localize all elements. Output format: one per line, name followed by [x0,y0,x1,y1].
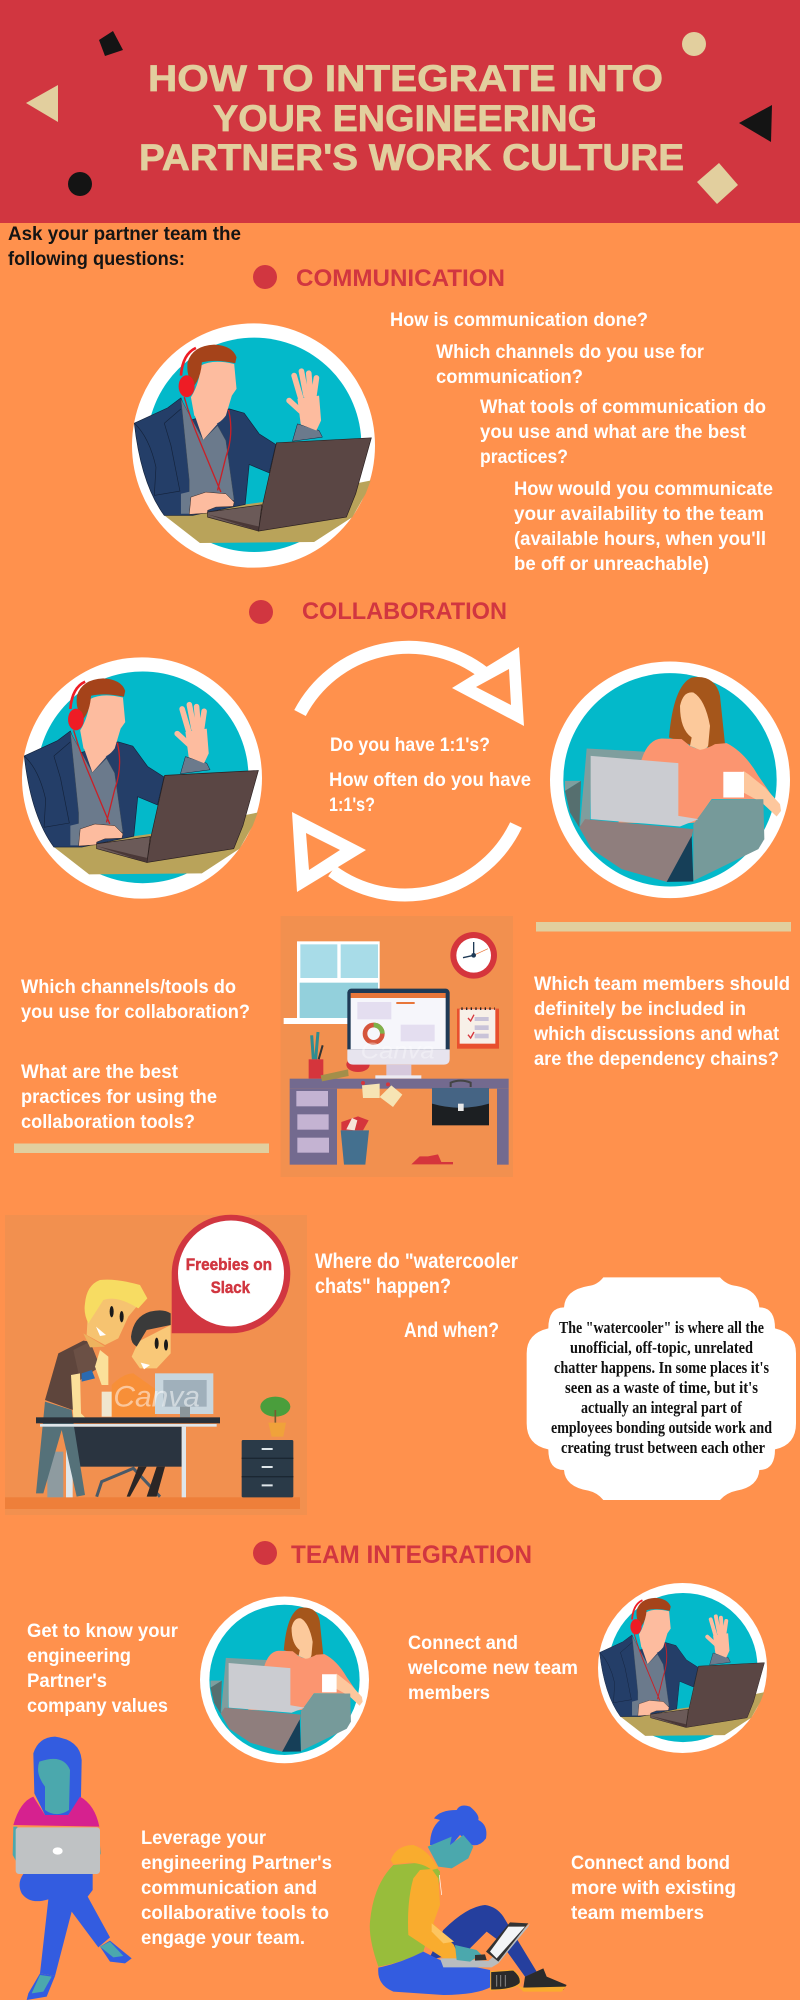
watercooler questions: Where do "watercooler [315,1250,518,1273]
welcome new members text: welcome new team [407,1657,578,1679]
illustration: man with laptop [22,657,262,899]
icon: black triangle [739,105,772,142]
bond with existing members text: more with existing [571,1877,736,1899]
engage tools text: engineering Partner's [141,1852,332,1874]
company values text: Get to know your [27,1620,178,1642]
team members question [533,973,790,1070]
team members question: Which team members should [534,973,790,995]
watercooler questions: chats" happen? [315,1275,451,1298]
communication questions: practices? [480,446,568,468]
illustration: office desk [281,916,513,1177]
engage tools text: engage your team. [141,1927,305,1949]
communication questions: be off or unreachable) [514,553,709,575]
icon: cream diamond [697,163,738,204]
team members question: which discussions and what [533,1023,779,1045]
communication questions: communication? [436,366,583,388]
intro text: Ask your partner team the [8,223,241,245]
engage tools text: collaborative tools to [141,1902,329,1924]
heading: collaboration: COLLABORATION [302,598,507,625]
collaboration tools questions: collaboration tools? [21,1111,195,1133]
welcome new members text: Connect and [408,1632,518,1654]
illustration: woman with laptop [550,662,790,898]
illustration: woman with laptop [200,1597,369,1763]
illustration: seated man with laptop [370,1806,567,1995]
title [139,58,684,178]
collaboration tools questions: practices for using the [21,1086,217,1108]
collaboration tools questions: Which channels/tools do [21,976,236,998]
welcome new members text [407,1632,578,1704]
header banner [0,0,800,223]
bond with existing members text: Connect and bond [571,1852,730,1874]
engage tools text [141,1827,332,1949]
one to one questions: Do you have 1:1's? [330,734,490,756]
communication questions: How would you communicate [514,478,773,500]
company values text: Partner's [27,1670,107,1692]
engage tools text: communication and [141,1877,317,1899]
illustration: two colleagues at a desk: Canva [113,1381,200,1414]
illustration: two colleagues at a desk [5,1215,307,1515]
speech bubble: Slack [211,1278,250,1297]
engage tools text: Leverage your [141,1827,266,1849]
icon: black square [99,31,123,56]
team members question: definitely be included in [534,998,746,1020]
heading: team integration: TEAM INTEGRATION [291,1541,532,1569]
communication questions: (available hours, when you'll [514,528,766,550]
communication questions: What tools of communication do [480,396,766,418]
collaboration tools questions: you use for collaboration? [21,1001,250,1023]
welcome new members text: members [408,1682,490,1704]
divider bar right [536,922,791,932]
title: HOW TO INTEGRATE INTO [148,58,663,99]
one to one questions [329,734,531,816]
communication questions: How is communication done? [390,309,648,331]
speech bubble: Freebies on [186,1255,272,1274]
collaboration tools questions [21,976,250,1133]
team members question: are the dependency chains? [534,1048,779,1070]
one to one questions: How often do you have [329,769,531,791]
callout: watercooler definition: seen as a waste of time, but it's [565,1378,758,1397]
icon: black circle [68,172,92,196]
company values text [27,1620,178,1717]
watercooler questions: And when? [404,1319,499,1342]
watercooler questions [315,1250,518,1342]
arrow: bottom cycle arrow [292,812,516,895]
collaboration tools questions: What are the best [21,1061,178,1083]
communication questions: you use and what are the best [480,421,746,443]
illustration: office desk: Canva [361,1038,435,1064]
illustration: seated woman with laptop [13,1737,132,2000]
heading: communication: COMMUNICATION [296,265,505,292]
intro text [8,223,241,270]
icon: cream circle [682,32,706,56]
title: YOUR ENGINEERING [213,98,597,139]
icon: cream triangle [26,85,58,122]
callout: watercooler definition: creating trust between each other [561,1438,765,1457]
communication questions [390,309,773,575]
callout: watercooler definition: actually an integral part of [581,1398,742,1417]
speech bubble [172,1215,290,1333]
one to one questions: 1:1's? [329,794,375,816]
communication questions: Which channels do you use for [436,341,704,363]
illustration: man with laptop [598,1583,767,1753]
bond with existing members text: team members [571,1902,704,1924]
company values text: engineering [27,1645,131,1667]
company values text: company values [27,1695,168,1717]
callout: watercooler definition [527,1277,796,1500]
arrow: top cycle arrow [300,647,524,726]
title: PARTNER'S WORK CULTURE [139,137,684,178]
intro text: following questions: [8,248,185,270]
communication questions: your availability to the team [514,503,764,525]
illustration: man with laptop [132,323,375,568]
bond with existing members text [571,1852,736,1924]
divider bar left [14,1144,269,1153]
callout: watercooler definition: unofficial, off-topic, unrelated [570,1338,753,1357]
